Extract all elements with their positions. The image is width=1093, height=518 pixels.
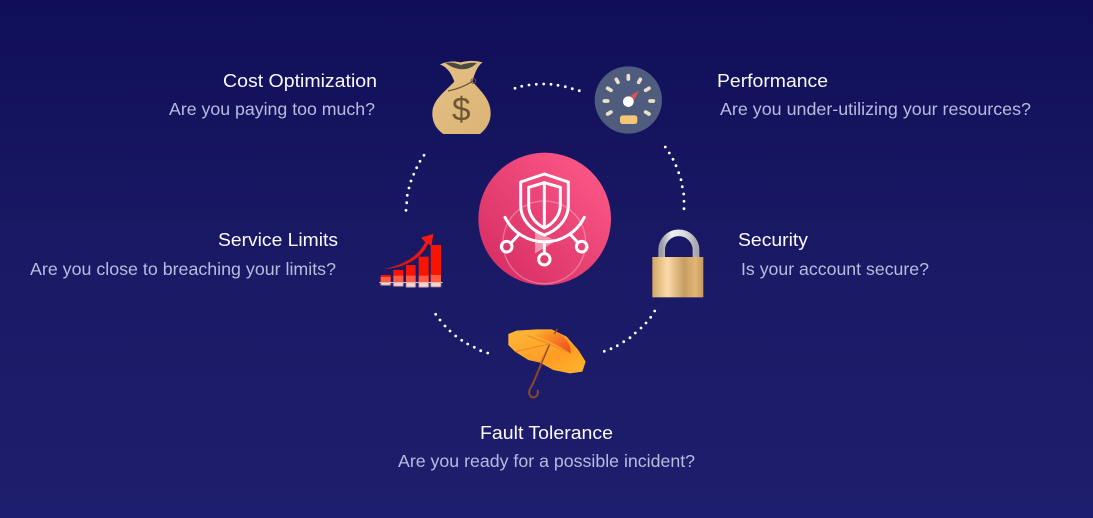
icon: money bag bbox=[432, 61, 491, 134]
question: security: Is your account secure? bbox=[741, 259, 929, 279]
question: fault tolerance: Are you ready for a possible incident? bbox=[398, 451, 695, 471]
question: performance: Are you under-utilizing your resources? bbox=[720, 99, 1031, 119]
label: fault tolerance: Fault Tolerance bbox=[480, 423, 613, 443]
label: security: Security bbox=[738, 230, 808, 250]
icon: rising bar chart bbox=[379, 234, 443, 287]
label: cost optimization: Cost Optimization bbox=[223, 71, 377, 91]
label: performance: Performance bbox=[717, 71, 828, 91]
dotted arc: service limits to cost bbox=[405, 154, 425, 212]
question: cost optimization: Are you paying too much? bbox=[169, 99, 375, 119]
icon: padlock bbox=[652, 233, 703, 297]
icon: speedometer gauge bbox=[595, 66, 662, 134]
dotted arc: cost to performance bbox=[514, 83, 581, 92]
label: service limits: Service Limits bbox=[218, 230, 338, 250]
icon: umbrella bbox=[508, 329, 586, 397]
dotted arc: performance to security bbox=[664, 146, 685, 210]
question: service limits: Are you close to breaching your limits? bbox=[30, 259, 336, 279]
icon: central shield badge bbox=[478, 153, 611, 285]
dotted arc: service limits to fault tolerance bbox=[434, 313, 489, 354]
dotted arc: fault tolerance to security bbox=[603, 310, 656, 353]
icon: money bag: $ bbox=[452, 91, 471, 128]
